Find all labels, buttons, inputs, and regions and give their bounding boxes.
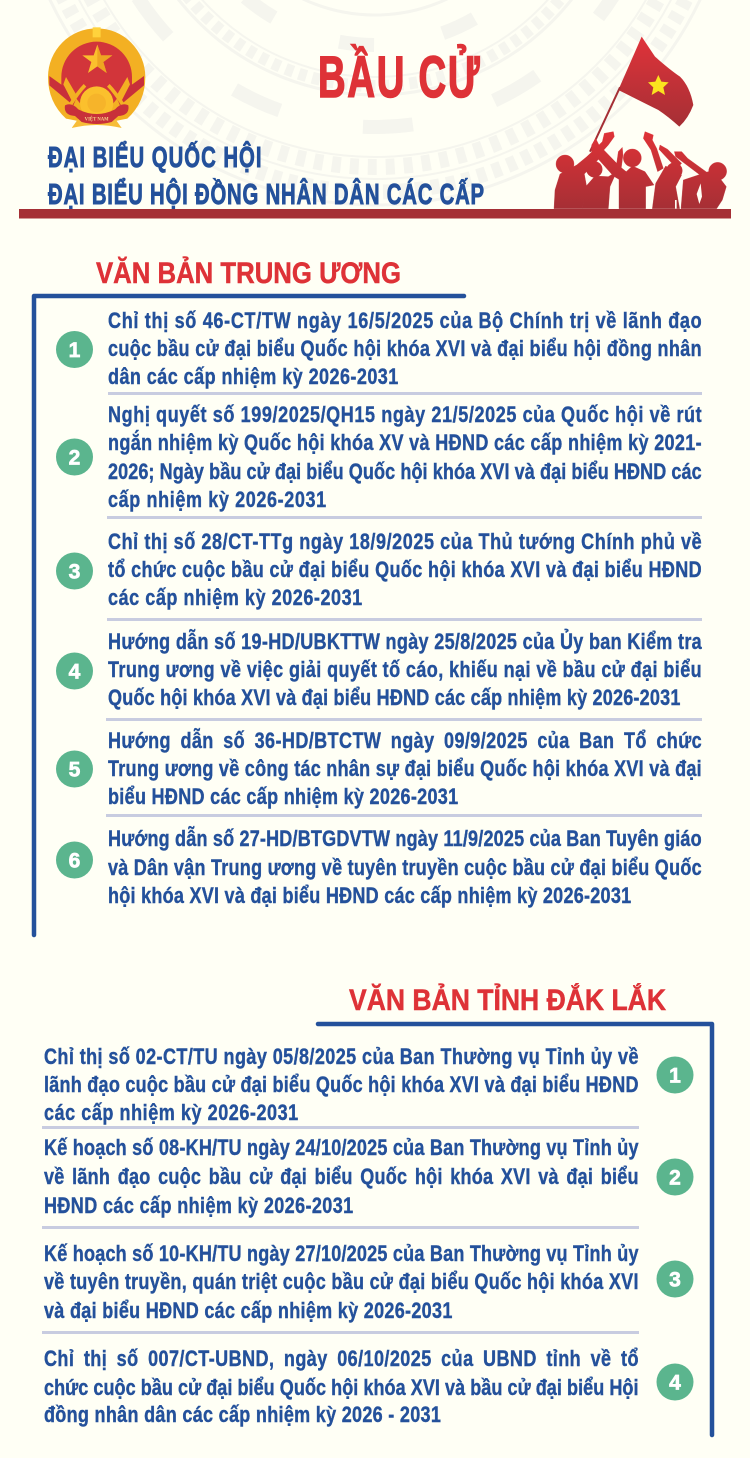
item 1 central: dân các cấp nhiệm kỳ 2026-2031 bbox=[108, 365, 398, 389]
item 4 central bbox=[56, 628, 702, 710]
item 5 central: 5 bbox=[69, 758, 81, 782]
item 4 central: Hướng dẫn số 19-HD/UBKTTW ngày 25/8/2025 của Ủy ban Kiểm tra bbox=[108, 628, 702, 654]
item 2 provincial bbox=[44, 1136, 694, 1218]
item 1 provincial: 1 bbox=[669, 1064, 681, 1088]
item 2 central: 2026; Ngày bầu cử đại biểu Quốc hội khóa XVI và đại biểu HĐND các bbox=[108, 460, 702, 484]
subtitle: ĐẠI BIỂU QUỐC HỘI bbox=[48, 139, 261, 174]
item 3 central bbox=[56, 530, 702, 610]
panel frame: provincial documents bbox=[318, 1024, 712, 1435]
item 6 central: 6 bbox=[69, 850, 80, 872]
item 3 central: tổ chức cuộc bầu cử đại biểu Quốc hội khóa XVI và đại biểu HĐND bbox=[108, 558, 702, 582]
item 3 provincial: về tuyên truyền, quán triệt cuộc bầu cử đại biểu Quốc hội khóa XVI bbox=[44, 1270, 638, 1294]
item 2 provincial: Kế hoạch số 08-KH/TU ngày 24/10/2025 của Ban Thường vụ Tỉnh ủy bbox=[44, 1136, 639, 1160]
item 5 central: Hướng dẫn số 36-HD/BTCTW ngày 09/9/2025 của Ban Tổ chức bbox=[108, 727, 702, 753]
item 2 central bbox=[56, 403, 702, 512]
item 3 provincial: và đại biểu HĐND các cấp nhiệm kỳ 2026-2031 bbox=[44, 1299, 452, 1323]
item 3 central: các cấp nhiệm kỳ 2026-2031 bbox=[108, 586, 362, 610]
item 2 provincial: HĐND các cấp nhiệm kỳ 2026-2031 bbox=[44, 1194, 353, 1218]
item 6 central bbox=[56, 825, 702, 908]
item 1 provincial: các cấp nhiệm kỳ 2026-2031 bbox=[44, 1101, 298, 1125]
item 3 provincial: 3 bbox=[669, 1268, 681, 1292]
title: BẦU CỬ bbox=[318, 43, 480, 110]
item 2 central: Nghị quyết số 199/2025/QH15 ngày 21/5/2025 của Quốc hội về rút bbox=[108, 403, 702, 427]
heading: central documents: VĂN BẢN TRUNG ƯƠNG bbox=[96, 256, 401, 290]
item 4 provincial bbox=[44, 1347, 694, 1427]
item 4 provincial: chức cuộc bầu cử đại biểu Quốc hội khóa XVI và bầu cử đại biểu Hội bbox=[44, 1376, 638, 1400]
item 6 central: Hướng dẫn số 27-HD/BTGDVTW ngày 11/9/2025 của Ban Tuyên giáo bbox=[108, 825, 702, 851]
item 2 provincial: 2 bbox=[669, 1166, 681, 1190]
item 3 central: 3 bbox=[69, 560, 80, 584]
item 2 central: ngắn nhiệm kỳ Quốc hội khóa XV và HĐND các cấp nhiệm kỳ 2021- bbox=[108, 429, 702, 455]
item 1 central: Chỉ thị số 46-CT/TW ngày 16/5/2025 của Bộ Chính trị về lãnh đạo bbox=[108, 309, 702, 333]
heading: provincial documents: VĂN BẢN TỈNH ĐẮK LẮK bbox=[349, 983, 666, 1017]
item 1 central: cuộc bầu cử đại biểu Quốc hội khóa XVI và đại biểu hội đồng nhân bbox=[108, 337, 702, 361]
item 6 central: hội khóa XVI và đại biểu HĐND các cấp nhiệm kỳ 2026-2031 bbox=[108, 884, 631, 908]
item 4 central: 4 bbox=[69, 660, 81, 684]
item 4 provincial: đồng nhân dân các cấp nhiệm kỳ 2026 - 2031 bbox=[44, 1403, 441, 1427]
panel: provincial documents list bbox=[42, 1045, 694, 1427]
item 3 central: Chỉ thị số 28/CT-TTg ngày 18/9/2025 của Thủ tướng Chính phủ về bbox=[108, 530, 702, 554]
item 3 provincial bbox=[44, 1242, 694, 1323]
item 1 provincial: Chỉ thị số 02-CT/TU ngày 05/8/2025 của Ban Thường vụ Tỉnh ủy về bbox=[44, 1045, 638, 1069]
item 5 central bbox=[56, 727, 702, 809]
item 4 provincial: 4 bbox=[669, 1372, 681, 1394]
item 2 central: 2 bbox=[69, 446, 80, 470]
header rule bbox=[19, 209, 731, 218]
item 1 provincial: lãnh đạo cuộc bầu cử đại biểu Quốc hội khóa XVI và đại biểu HĐND bbox=[44, 1073, 638, 1097]
item 4 central: Trung ương về việc giải quyết tố cáo, khiếu nại về bầu cử đại biểu bbox=[108, 658, 702, 682]
emblem motto: VIỆT NAM bbox=[85, 115, 109, 123]
item 6 central: và Dân vận Trung ương về tuyên truyền cuộc bầu cử đại biểu Quốc bbox=[108, 856, 702, 880]
item 2 central: cấp nhiệm kỳ 2026-2031 bbox=[108, 488, 326, 512]
item 4 provincial: Chỉ thị số 007/CT-UBND, ngày 06/10/2025 của UBND tỉnh về tổ bbox=[44, 1347, 639, 1371]
item 2 provincial: về lãnh đạo cuộc bầu cử đại biểu Quốc hội khóa XVI và đại biểu bbox=[44, 1165, 639, 1189]
background: bronze drum watermark bbox=[15, 0, 735, 205]
icon: national emblem bbox=[48, 27, 145, 128]
item 5 central: Trung ương về công tác nhân sự đại biểu Quốc hội khóa XVI và đại bbox=[108, 757, 702, 781]
item 4 central: Quốc hội khóa XVI và đại biểu HĐND các cấp nhiệm kỳ 2026-2031 bbox=[108, 686, 680, 710]
item 3 provincial: Kế hoạch số 10-KH/TU ngày 27/10/2025 của Ban Thường vụ Tỉnh ủy bbox=[44, 1242, 639, 1266]
subtitle bbox=[48, 139, 484, 211]
icon: flag and crowd bbox=[554, 37, 727, 209]
item 1 central: 1 bbox=[69, 339, 81, 362]
item 1 central bbox=[56, 309, 702, 389]
item 1 provincial bbox=[44, 1045, 694, 1125]
item 5 central: biểu HĐND các cấp nhiệm kỳ 2026-2031 bbox=[108, 785, 458, 809]
panel: central documents list bbox=[56, 309, 702, 908]
subtitle: ĐẠI BIỂU HỘI ĐỒNG NHÂN DÂN CÁC CẤP bbox=[48, 176, 484, 211]
panel frame: central documents bbox=[34, 296, 464, 935]
